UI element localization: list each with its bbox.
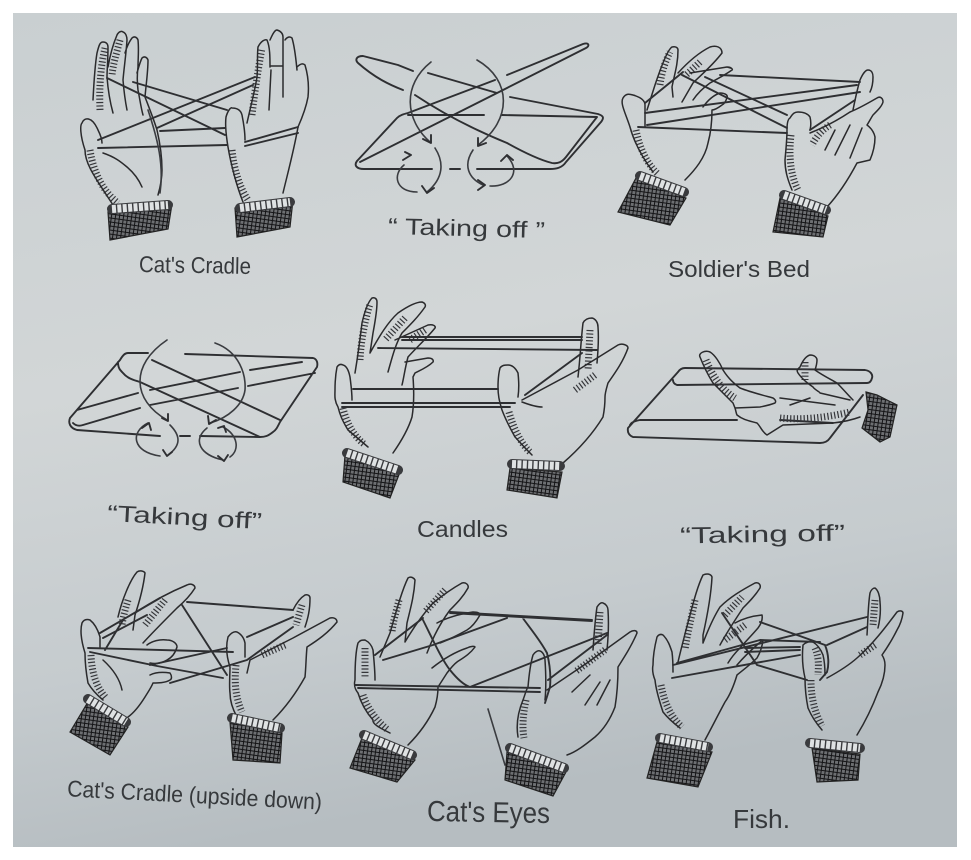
left hand [647, 574, 763, 787]
strings [672, 613, 867, 680]
figure: Cat's Eyes [350, 577, 637, 796]
caption: Candles: Candles [417, 516, 508, 542]
strings [88, 598, 293, 683]
caption: Taking off middle left: “Taking off” [107, 500, 263, 534]
left hand [70, 571, 195, 755]
strings [638, 72, 860, 133]
figure: Taking off hand, middle right [628, 351, 897, 443]
cuff [230, 718, 282, 763]
left hand [618, 46, 732, 225]
cuff [235, 200, 293, 237]
figure: Cat's Cradle [81, 30, 308, 240]
right hand [773, 70, 883, 237]
caption: Taking off middle right: “Taking off” [680, 520, 845, 548]
right hand [227, 595, 337, 763]
left hand [81, 31, 172, 240]
left hand [335, 298, 435, 498]
right hand [226, 30, 308, 237]
cuff [108, 204, 172, 240]
right hand [498, 318, 628, 498]
caption: Taking off top: “ Taking off ” [388, 213, 545, 243]
caption: Soldier's Bed: Soldier's Bed [668, 256, 810, 282]
diagram: Taking off top [356, 43, 603, 193]
left hand [350, 577, 480, 782]
cuff [343, 453, 400, 498]
figure: Soldier's Bed [618, 46, 883, 237]
caption: Cat's Eyes: Cat's Eyes [427, 796, 550, 830]
right hand [505, 603, 637, 796]
caption: Cat's Cradle: Cat's Cradle [139, 251, 251, 279]
cuff [350, 735, 415, 782]
cuff [505, 748, 566, 796]
cuff [70, 699, 128, 755]
cuff [862, 392, 897, 442]
right hand [802, 588, 903, 782]
caption: Fish: Fish. [733, 804, 790, 834]
figure: Fish [647, 574, 903, 787]
caption: Cat's Cradle upside down: Cat's Cradle (upside down) [67, 775, 323, 815]
diagram: Taking off middle left [69, 340, 317, 461]
figure: Candles [335, 298, 628, 498]
hand [700, 351, 897, 442]
strings [342, 337, 597, 407]
cuff [647, 738, 712, 787]
cuff [507, 464, 562, 498]
strings [628, 368, 872, 443]
figure: Cat's Cradle upside down [70, 571, 337, 763]
cuff [810, 743, 860, 782]
cuff [618, 176, 686, 225]
cuff [773, 195, 828, 237]
strings [355, 612, 607, 765]
strings [98, 77, 298, 193]
